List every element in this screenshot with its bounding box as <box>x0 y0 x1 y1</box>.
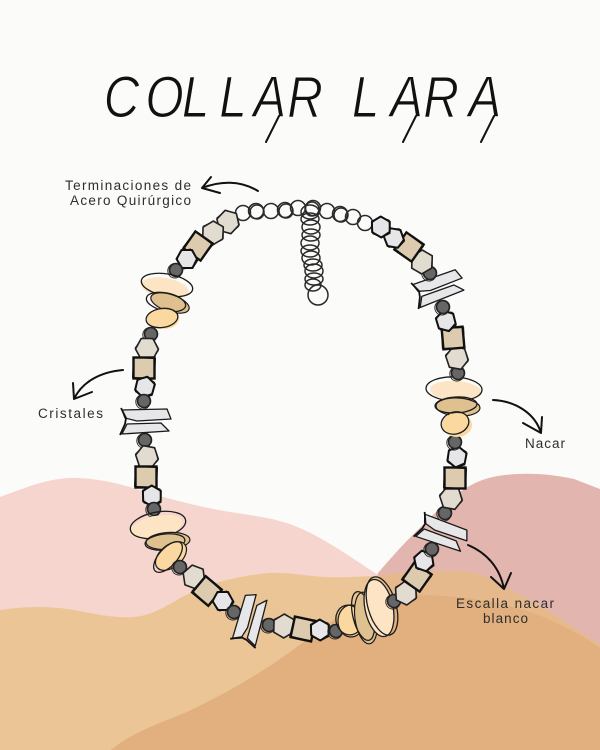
arrow: to Cristales <box>73 370 123 399</box>
crystal: lower right <box>414 512 471 556</box>
nacre cluster: right <box>426 376 483 437</box>
label: Terminaciones de Acero Quirúrgico: Acero Quirúrgico <box>70 193 191 208</box>
crystal: upper right <box>410 268 467 309</box>
crystal: bottom <box>230 591 271 648</box>
title flourish: long strokes on the letter A <box>266 116 494 142</box>
crystal: left <box>120 408 171 435</box>
beads: left lower <box>133 434 167 517</box>
label: Nacar: Nacar <box>525 436 566 451</box>
label: Escalla nacar blanco: Escalla nacar <box>456 596 554 611</box>
arrow: to Escalla nacar blanco <box>468 545 511 589</box>
label: Cristales: Cristales <box>38 406 103 421</box>
beads: lower left <box>172 560 240 620</box>
beads: upper right <box>367 213 437 281</box>
arrow: to chain terminations <box>202 177 258 193</box>
chain links <box>236 200 372 230</box>
nacre cluster: bottom right <box>333 573 404 645</box>
label: Escalla nacar blanco: blanco <box>483 611 528 626</box>
nacre cluster: left upper <box>139 270 195 330</box>
arrow: to Nacar <box>493 400 542 433</box>
beads: right upper <box>433 300 470 381</box>
background hills <box>0 474 600 750</box>
nacre cluster: left lower <box>127 507 192 577</box>
hanging extension chain <box>301 205 328 305</box>
label: Escalla nacar blanco <box>456 596 554 626</box>
necklace <box>120 200 483 648</box>
label: Terminaciones de Acero Quirúrgico <box>65 178 191 208</box>
beads: lower right <box>386 542 438 609</box>
title: COLLAR LARA <box>104 65 501 130</box>
label: Terminaciones de Acero Quirúrgico: Terminaciones de <box>65 178 191 193</box>
beads: upper left <box>168 208 242 278</box>
beads: bottom <box>261 610 342 644</box>
beads: left middle <box>131 328 160 409</box>
beads: right lower <box>437 436 472 521</box>
